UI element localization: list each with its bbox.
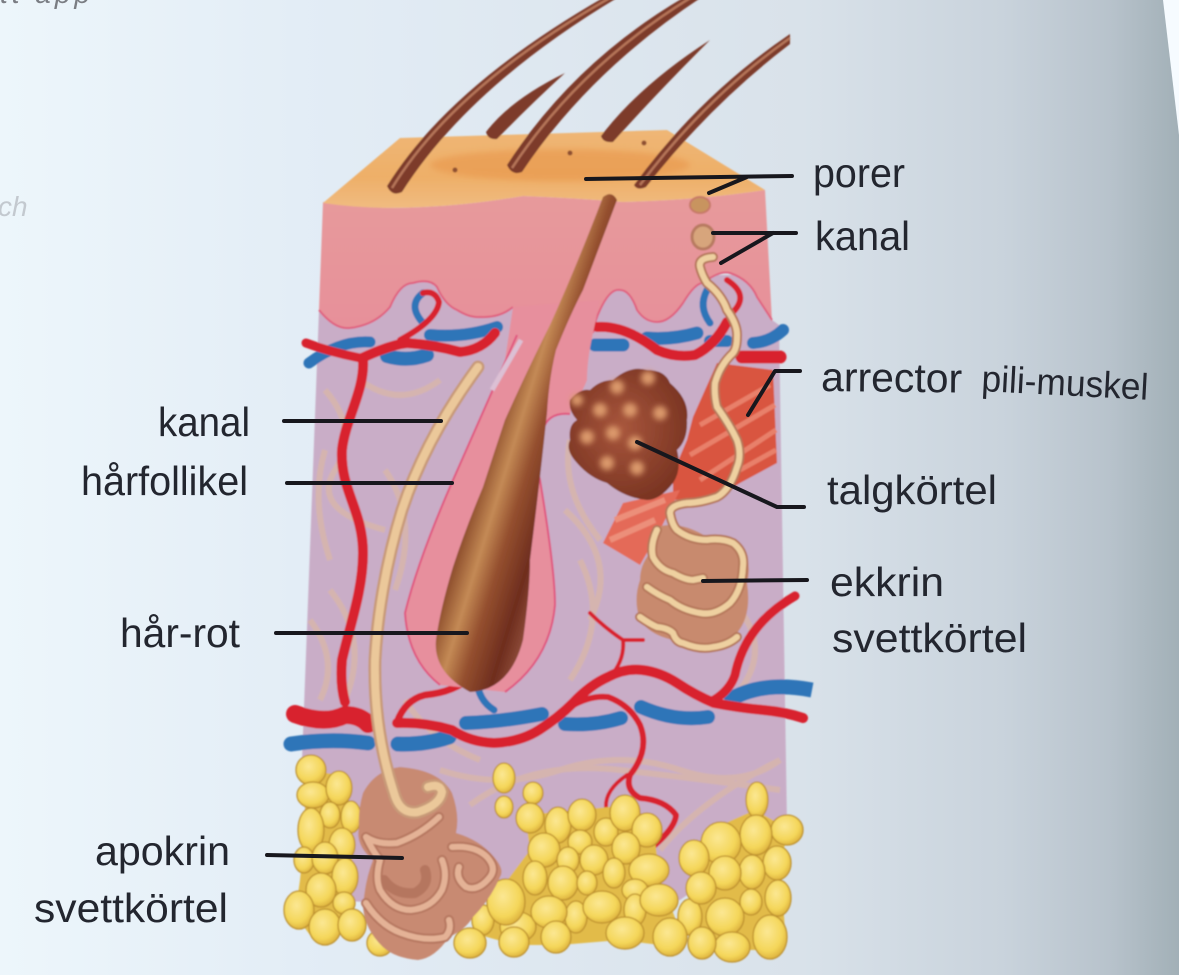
lower red vessels: [295, 596, 803, 853]
apocrine gland mass: [358, 767, 502, 960]
label: pili-muskel: pili-muskel: [981, 358, 1149, 408]
label: hårfollikel: hårfollikel: [81, 458, 248, 504]
epidermis: [319, 190, 772, 333]
upper red vessels: [306, 280, 780, 702]
faint show-through text: [0, 0, 90, 222]
label: arrector: arrector: [821, 354, 962, 401]
surface shading: [430, 149, 690, 181]
bright gap at page edge: [1163, 0, 1179, 135]
eccrine gland duct and coils: [640, 197, 743, 648]
lower blue vessels: [291, 680, 812, 744]
label: svettkörtel right: svettkörtel: [832, 615, 1027, 661]
label lines: [267, 176, 807, 858]
pores: [452, 140, 646, 172]
label: talgkörtel: talgkörtel: [827, 467, 997, 513]
follicle sheath: [405, 300, 600, 692]
arrector pili muscle: [603, 363, 777, 565]
sebaceous gland: [569, 369, 687, 500]
label: ekkrin: ekkrin: [830, 559, 944, 605]
label: svettkörtel left: svettkörtel: [34, 885, 228, 931]
apocrine gland coils: [366, 817, 493, 939]
label: kanal right: kanal: [815, 213, 910, 259]
dermis: [302, 275, 787, 905]
eccrine gland mass: [636, 525, 749, 650]
apocrine gland duct: [375, 367, 478, 812]
hairs above skin: [387, 0, 790, 194]
upper blue vessels: [309, 290, 783, 363]
fat cells: [284, 755, 803, 962]
hair root and shaft: [436, 194, 617, 692]
label: hår-rot: hår-rot: [120, 610, 241, 656]
skin block: [284, 0, 812, 962]
skin surface: [323, 130, 765, 208]
papillae outline: [319, 272, 772, 333]
label: apokrin: apokrin: [95, 828, 230, 874]
label: kanal left: kanal: [158, 399, 250, 445]
dermis fibres: [310, 380, 780, 850]
label: porer: porer: [813, 150, 905, 196]
